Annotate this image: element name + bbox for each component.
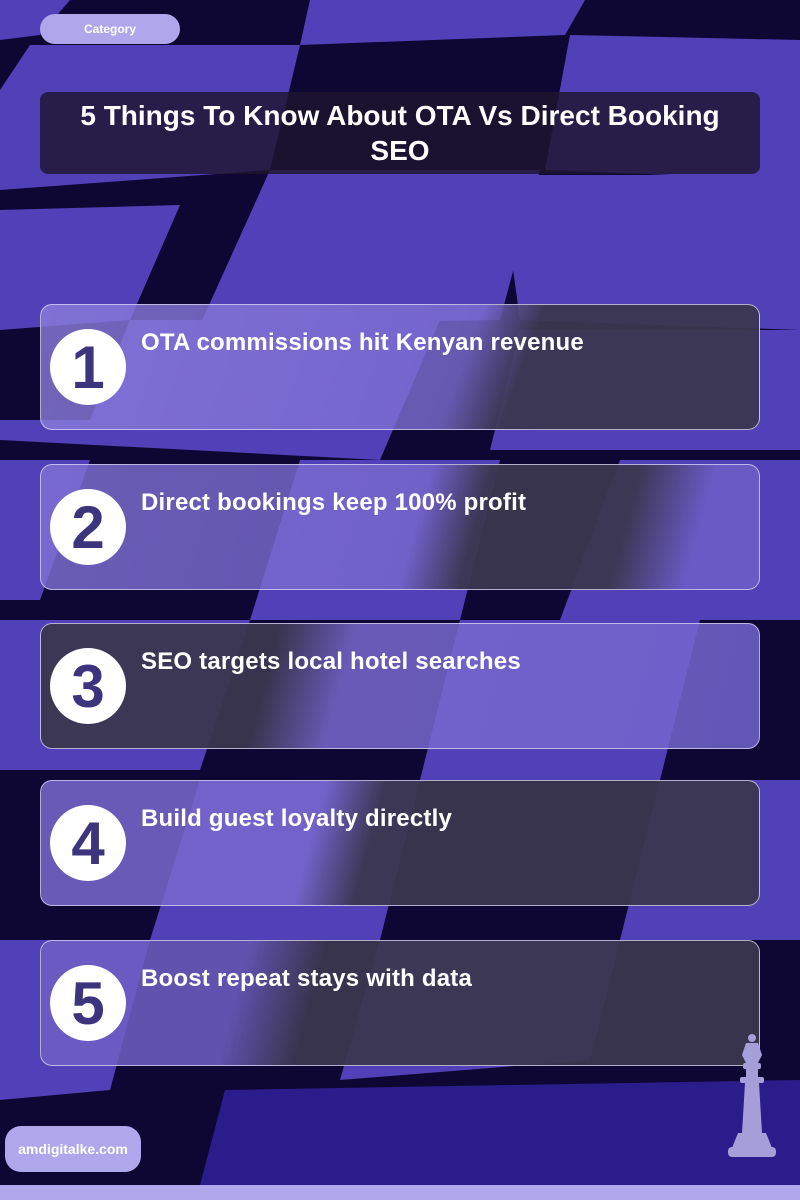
card text 2: Direct bookings keep 100% profit [141, 489, 526, 516]
number 2: 2 [71, 494, 105, 560]
category pill: Category [84, 22, 136, 36]
number 5: 5 [71, 970, 105, 1036]
card text 5: Boost repeat stays with data [141, 965, 472, 992]
card text 1: OTA commissions hit Kenyan revenue [141, 329, 584, 356]
icon: chess queen [728, 1034, 776, 1157]
number 4 [50, 805, 126, 881]
number 5 [50, 965, 126, 1041]
card text 3: SEO targets local hotel searches [141, 648, 521, 675]
card 5 [40, 940, 760, 1066]
bottom bar [0, 1185, 800, 1200]
footer website pill [5, 1126, 141, 1172]
title box: 5 Things To Know About OTA Vs Direct Booking SEO [80, 100, 720, 166]
card 2 [40, 464, 760, 590]
category pill [40, 14, 180, 44]
number 4: 4 [71, 810, 105, 876]
footer website pill: amdigitalke.com [18, 1141, 128, 1157]
card 3 [40, 623, 760, 749]
card text 4: Build guest loyalty directly [141, 805, 452, 832]
number 2 [50, 489, 126, 565]
number 1 [50, 329, 126, 405]
card 1 [40, 304, 760, 430]
number 1: 1 [71, 334, 105, 400]
number 3: 3 [71, 652, 105, 720]
number 3 [50, 648, 126, 724]
card 4 [40, 780, 760, 906]
